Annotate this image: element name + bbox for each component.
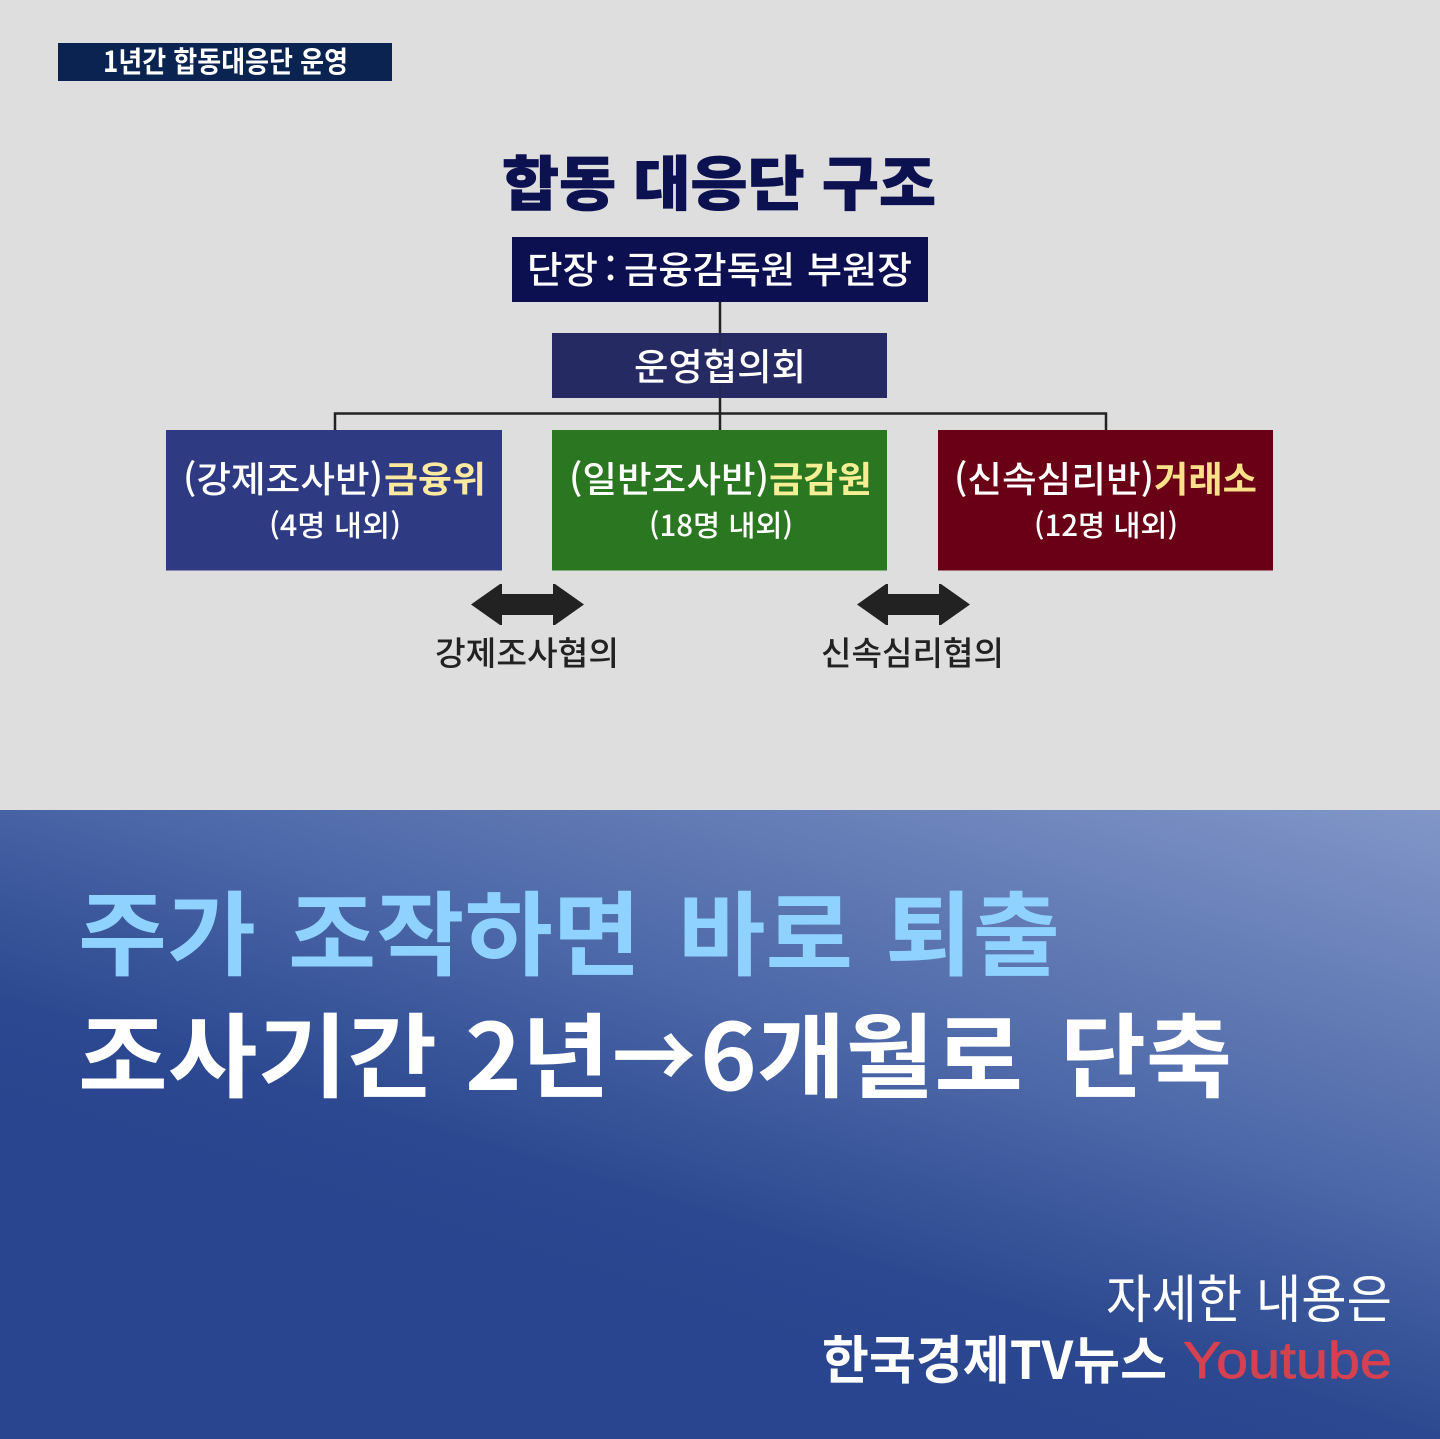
headline: line one: 바로 [678, 862, 853, 995]
headline: line two: 조사기간 [78, 984, 437, 1117]
box: head of unit: : [605, 240, 616, 294]
panel: general investigation team: (18명 내외) [649, 503, 793, 545]
footer: more details prompt: 자세한 내용은 [1106, 1258, 1392, 1333]
panel: general investigation team: (일반조사반) [569, 451, 769, 503]
panel: rapid review team: (신속심리반) [954, 451, 1154, 503]
headline: line one [78, 862, 1060, 995]
panel: compulsory investigation team [166, 430, 502, 570]
box: steering council: 운영협의회 [634, 337, 806, 391]
headline: line one: 퇴출 [885, 862, 1060, 995]
label: rapid review consultation: 신속심리협의 [821, 627, 1004, 675]
box: head of unit [512, 237, 928, 302]
headline: line one: 주가 [78, 862, 256, 995]
panel: general investigation team: 금감원 [769, 451, 872, 503]
box: head of unit: 금융감독원 [624, 240, 795, 294]
panel: rapid review team: 거래소 [1154, 451, 1257, 503]
panel: compulsory investigation team: (강제조사반) [183, 451, 383, 503]
arrow: rapid review consultation [857, 584, 970, 625]
footer: channel name [822, 1319, 1392, 1394]
footer: channel name: 한국경제TV뉴스 [822, 1319, 1167, 1394]
headline: line one: 조작하면 [288, 862, 641, 995]
label: compulsory investigation consultation: 강제조사협의 [435, 627, 619, 675]
panel: rapid review team [938, 430, 1273, 570]
tag: section label: 1년간 합동대응단 운영 [103, 39, 348, 81]
headline: line two: 단축 [1060, 984, 1232, 1117]
panel: compulsory investigation team: 금융위 [384, 451, 486, 503]
headline: line two: 2년 [465, 984, 610, 1117]
footer: channel name: Youtube [1183, 1332, 1392, 1390]
box: steering council [552, 333, 887, 398]
connector lines [335, 302, 1106, 430]
box: head of unit: 부원장 [807, 240, 912, 294]
panel: lower headline background [0, 810, 1440, 1439]
title: 합동 대응단 구조 [502, 137, 936, 222]
box: head of unit: 단장 [527, 240, 598, 294]
headline: line two: 6개월로 [700, 984, 1023, 1117]
panel: general investigation team [552, 430, 887, 570]
arrow: compulsory investigation consultation [471, 584, 584, 625]
panel: compulsory investigation team: (4명 내외) [269, 503, 401, 545]
headline: line two: → [612, 984, 696, 1117]
headline: line two [78, 984, 1232, 1117]
panel: rapid review team: (12명 내외) [1034, 503, 1178, 545]
